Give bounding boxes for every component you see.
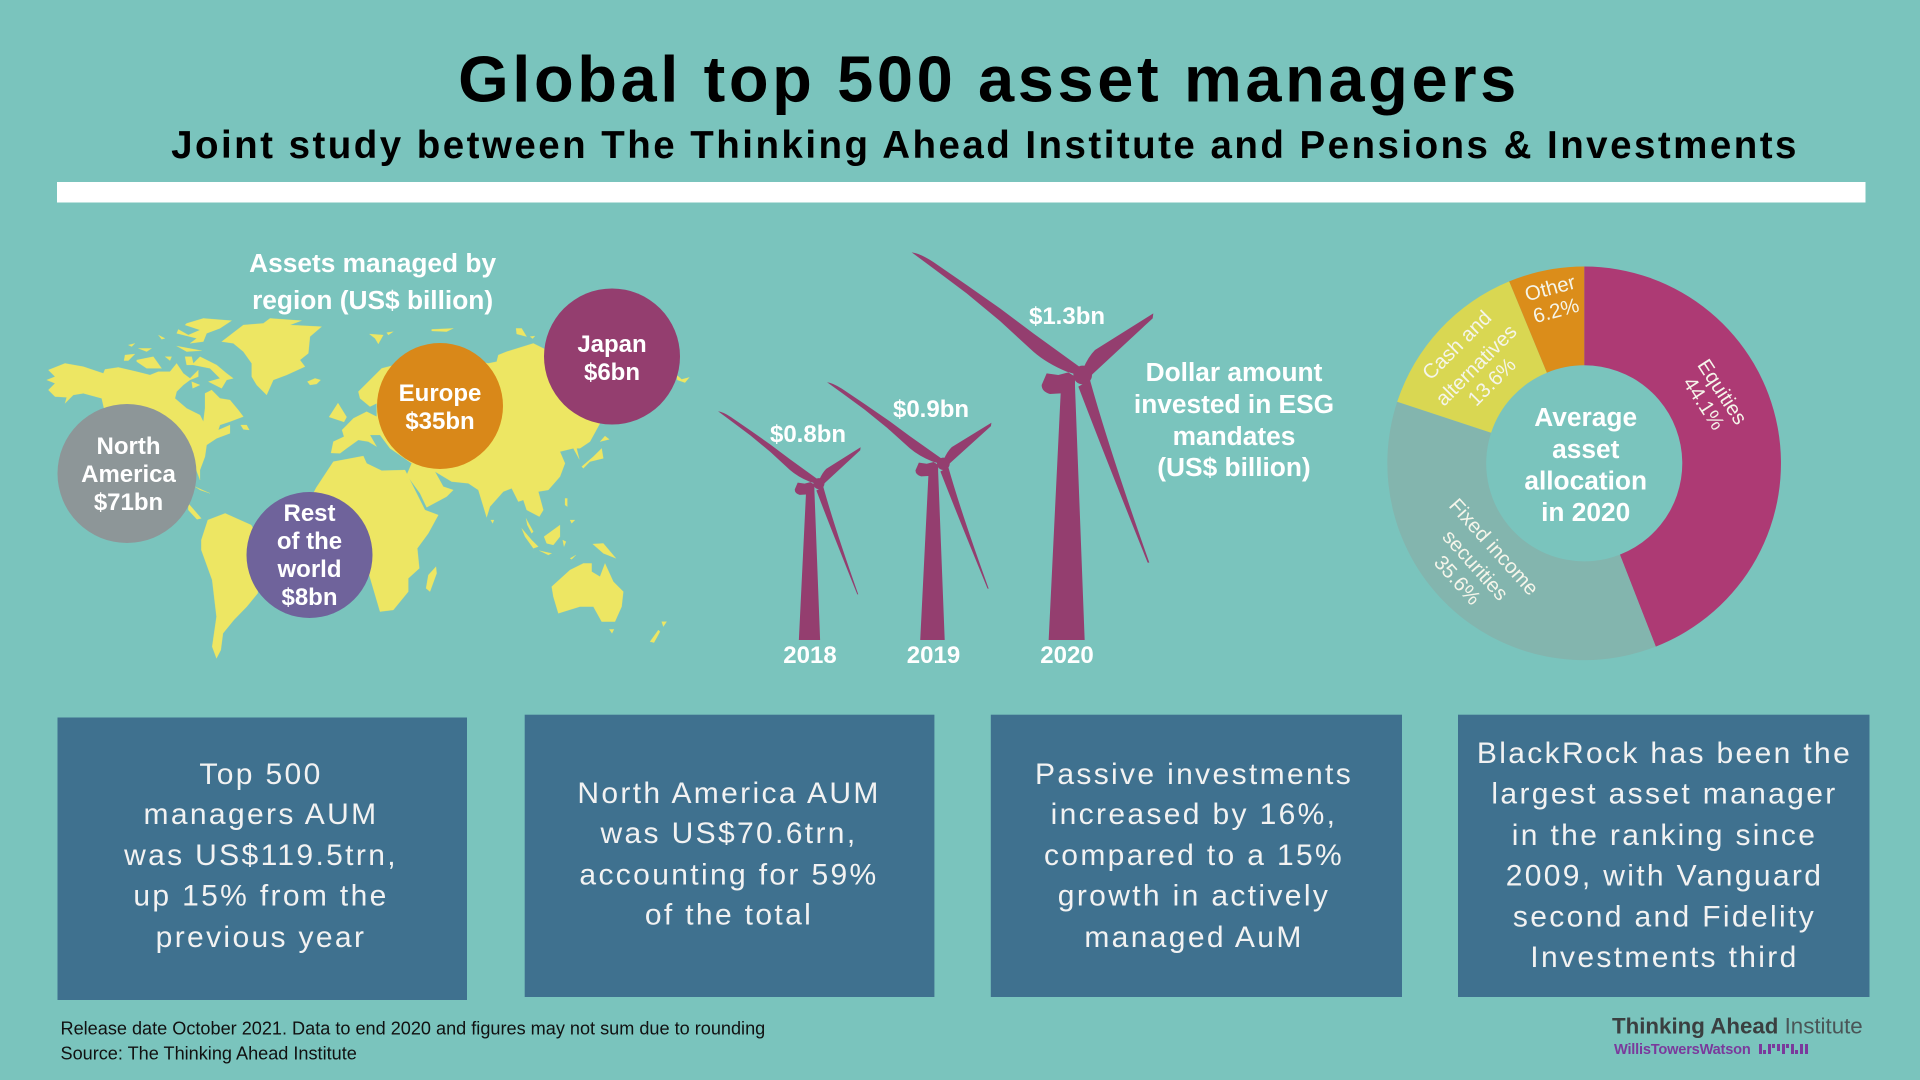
subtitle: Joint study between The Thinking Ahead Institute and Pensions & Investments	[171, 124, 1799, 167]
heading: dollar amount in ESG: (US$ billion)	[1157, 452, 1311, 482]
bubble: Europe: $35bn	[405, 408, 475, 435]
bubble: Japan: Japan	[577, 331, 647, 358]
slice: other	[1509, 266, 1584, 373]
year labels: 2018	[783, 642, 837, 669]
year labels	[783, 642, 1094, 669]
panel: ESG mandates wind turbines	[718, 252, 1334, 669]
panel: BlackRock: BlackRock has been the	[1477, 737, 1852, 770]
year labels: 2020	[1040, 642, 1094, 669]
panel: passive investments: compared to a 15%	[1044, 839, 1344, 872]
slice: cash and alternatives	[1397, 281, 1547, 433]
panel: passive investments: growth in actively	[1058, 880, 1330, 913]
footnote: Release date October 2021. Data to end 2020 and figures may not sum due to rounding	[60, 1018, 765, 1038]
donut centre text: Average	[1534, 402, 1637, 432]
panel: top 500 AUM: up 15% from the	[133, 880, 389, 913]
label: other: 6.2%	[1531, 294, 1582, 328]
slice: equities	[1584, 266, 1781, 647]
bubble: Rest of the world: world	[276, 556, 342, 583]
label: equities: Equities	[1693, 355, 1752, 429]
footnote	[60, 1018, 765, 1064]
bubble: Rest of the world: $8bn	[281, 584, 338, 611]
panel: North America AUM: accounting for 59%	[579, 859, 879, 892]
label: equities: 44.1%	[1678, 373, 1729, 434]
label: fixed income: Fixed income	[1444, 494, 1543, 600]
label: cash and alternatives: Cash and	[1418, 306, 1496, 385]
title: Global top 500 asset managers	[458, 42, 1520, 116]
bubble: North America: North	[97, 433, 160, 460]
panel: passive investments: managed AuM	[1084, 921, 1304, 954]
donut centre text: in 2020	[1541, 497, 1630, 527]
turbine: 2019	[827, 382, 991, 640]
turbine: 2018	[718, 411, 861, 640]
panel: top 500 AUM	[58, 718, 467, 1000]
bubble: Japan	[544, 288, 680, 424]
panel: BlackRock: largest asset manager	[1491, 778, 1838, 811]
heading: dollar amount in ESG: invested in ESG	[1134, 389, 1334, 419]
bubble: Rest of the world	[246, 492, 372, 618]
year labels: 2019	[907, 642, 960, 669]
panel: top 500 AUM: was US$119.5trn,	[123, 839, 398, 872]
donut centre text	[1524, 402, 1647, 527]
panel: passive investments	[991, 715, 1402, 997]
logo: Thinking Ahead Institute: Thinking Ahead Institute	[1612, 1014, 1863, 1038]
heading: assets by region	[249, 248, 496, 315]
panel: top 500 AUM: Top 500	[199, 758, 323, 791]
logo: Thinking Ahead Institute	[1612, 1014, 1863, 1058]
panel: BlackRock: second and Fidelity	[1513, 900, 1816, 934]
panel: North America AUM: of the total	[645, 899, 813, 932]
heading: assets by region: region (US$ billion)	[252, 285, 493, 315]
panel: BlackRock: in the ranking since	[1512, 819, 1817, 852]
slice: fixed income	[1387, 402, 1656, 660]
turbine: 2020	[912, 252, 1153, 640]
value labels: $0.8bn	[770, 421, 846, 448]
bubble: Europe	[377, 343, 503, 469]
panel: passive investments: Passive investments	[1035, 758, 1353, 791]
value labels: $1.3bn	[1029, 303, 1105, 330]
value labels	[770, 303, 1105, 448]
value labels: $0.9bn	[893, 396, 969, 423]
bubble: Rest of the world: Rest	[283, 500, 336, 527]
heading: assets by region: Assets managed by	[249, 248, 496, 278]
label: cash and alternatives: 13.6%	[1463, 353, 1521, 411]
bubble: Rest of the world: of the	[277, 528, 342, 555]
heading: dollar amount in ESG	[1134, 357, 1334, 482]
panel: BlackRock: 2009, with Vanguard	[1506, 860, 1823, 892]
panel: BlackRock	[1458, 715, 1870, 997]
donut chart: average asset allocation	[1387, 266, 1781, 660]
panel: North America AUM: North America AUM	[577, 777, 881, 810]
label: fixed income: securities	[1438, 525, 1513, 605]
label: fixed income: 35.6%	[1429, 551, 1485, 610]
heading: dollar amount in ESG: Dollar amount	[1146, 357, 1323, 387]
donut centre text: allocation	[1524, 466, 1647, 496]
bubble: North America: $71bn	[94, 489, 163, 516]
world map	[47, 318, 689, 658]
panel: assets managed by region	[47, 248, 689, 658]
label: other	[1522, 271, 1582, 328]
logo: Thinking Ahead Institute: WillisTowersWatson	[1614, 1042, 1751, 1058]
bubble: Europe: Europe	[399, 380, 481, 407]
panel: passive investments: increased by 16%,	[1051, 798, 1337, 831]
bubble: North America	[58, 404, 196, 543]
panel: top 500 AUM: managers AUM	[144, 798, 378, 831]
panel: BlackRock: Investments third	[1530, 941, 1799, 974]
footnote: Source: The Thinking Ahead Institute	[60, 1044, 357, 1064]
icon: WTW bars	[1759, 1044, 1808, 1054]
bubble: North America: America	[81, 461, 177, 488]
heading: dollar amount in ESG: mandates	[1173, 421, 1295, 451]
panel: North America AUM	[525, 715, 934, 997]
label: cash and alternatives: alternatives	[1431, 320, 1522, 411]
panel: top 500 AUM: previous year	[156, 921, 366, 954]
donut centre text: asset	[1552, 434, 1620, 464]
label: other: Other	[1522, 271, 1578, 306]
bubble: Japan: $6bn	[584, 359, 640, 386]
panel: North America AUM: was US$70.6trn,	[599, 817, 858, 850]
